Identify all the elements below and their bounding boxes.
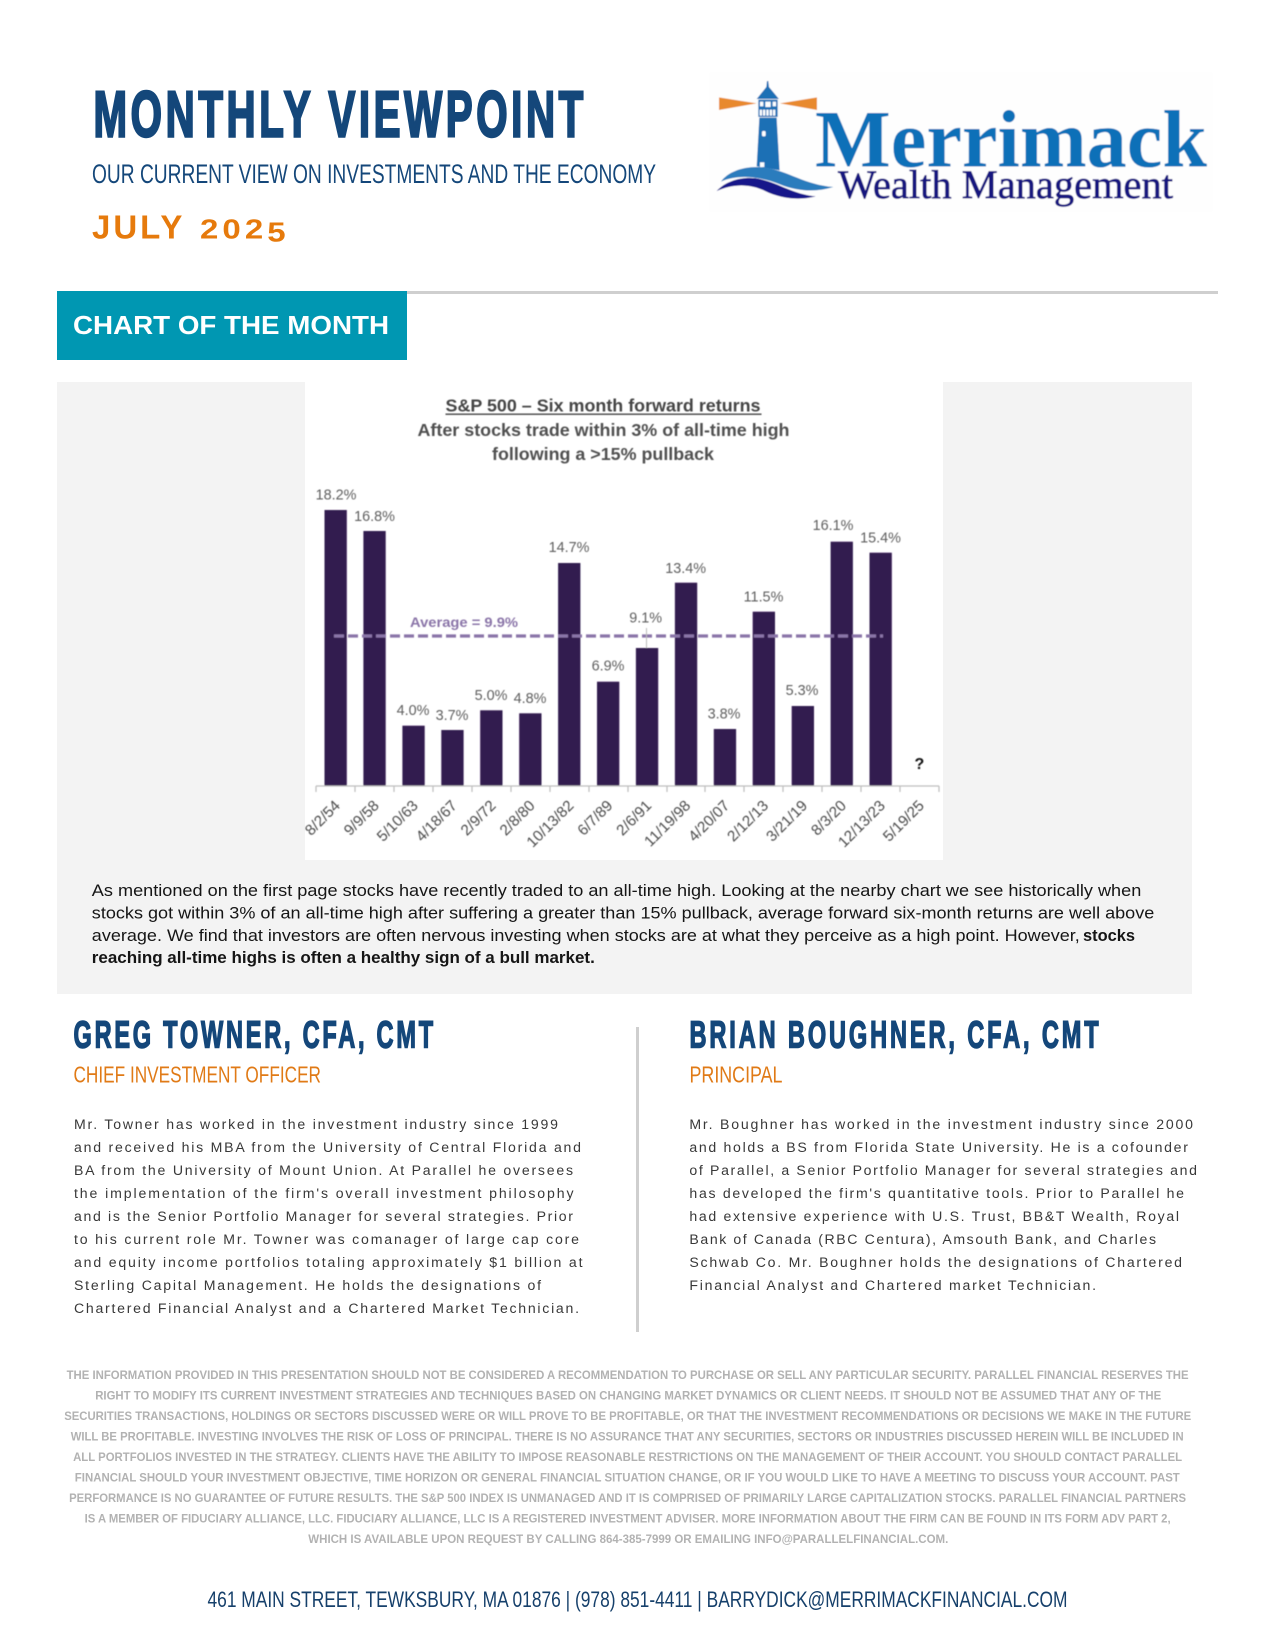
role: CHIEF INVESTMENT OFFICER — [74, 1062, 321, 1088]
date labels: 8/2/54 — [302, 797, 344, 839]
bar value labels: 6.9% — [592, 659, 625, 675]
disclaimer: THE INFORMATION PROVIDED IN THIS PRESENTATION SHOULD NOT BE CONSIDERED A RECOMMENDATION TO PURCHASE OR SELL ANY PARTICULAR SECURITY. PARALLEL FINANCIAL RESERVES THE — [67, 1370, 1189, 1382]
chart title: S&P 500 – Six month forward returns — [446, 396, 761, 416]
disclaimer: SECURITIES TRANSACTIONS, HOLDINGS OR SECTORS DISCUSSED WERE OR WILL PROVE TO BE PROFITABLE, OR THAT THE INVESTMENT RECOMMENDATIONS OR DECISIONS WE MAKE IN THE FUTURE — [64, 1411, 1192, 1423]
date labels: 5/10/63 — [374, 797, 422, 845]
icon: lighthouse — [717, 81, 833, 199]
chart title: following a >15% pullback — [492, 444, 714, 464]
date — [92, 208, 290, 248]
biography — [74, 1116, 583, 1316]
biography: of Parallel, a Senior Portfolio Manager for several strategies and — [689, 1162, 1197, 1178]
disclaimer: WILL BE PROFITABLE. INVESTING INVOLVES THE RISK OF LOSS OF PRINCIPAL. THERE IS NO ASSURANCE THAT ANY SECURITIES, SECTORS OR INDUSTRIES DISCUSSED HEREIN WILL BE INCLUDED IN — [71, 1432, 1184, 1444]
logo: Merrimack Wealth Management — [709, 72, 1213, 212]
logo wordmark: Merrimack — [815, 94, 1207, 184]
commentary text: reaching all-time highs is often a healthy sign of a bull market. — [92, 949, 595, 967]
bar value labels: 14.7% — [549, 540, 590, 556]
date labels — [302, 797, 928, 851]
bar value labels: 18.2% — [316, 487, 357, 503]
commentary text: As mentioned on the first page stocks have recently traded to an all-time high. Looking at the nearby chart we see historically when — [92, 882, 1141, 900]
bar value labels: 9.1% — [629, 611, 662, 627]
axis — [316, 786, 939, 792]
commentary text: stocks — [1083, 927, 1135, 945]
biography: BA from the University of Mount Union. At Parallel he oversees — [74, 1162, 573, 1178]
disclaimer: FINANCIAL SHOULD YOUR INVESTMENT OBJECTIVE, TIME HORIZON OR GENERAL FINANCIAL SITUATION CHANGE, OR IF YOU WOULD LIKE TO HAVE A MEETING TO DISCUSS YOUR ACCOUNT. PAST — [75, 1472, 1180, 1484]
bar value labels: 15.4% — [860, 531, 901, 547]
date: 5 — [267, 218, 290, 248]
biography: the implementation of the firm's overall investment philosophy — [74, 1185, 574, 1201]
chart title: After stocks trade within 3% of all-time high — [418, 420, 790, 440]
disclaimer — [64, 1370, 1192, 1546]
disclaimer: PERFORMANCE IS NO GUARANTEE OF FUTURE RESULTS. THE S&P 500 INDEX IS UNMANAGED AND IT IS COMPRISED OF PRIMARILY LARGE CAPITALIZATION STOCKS. PARALLEL FINANCIAL PARTNERS — [69, 1493, 1186, 1505]
panel: chart and commentary — [57, 382, 1192, 994]
commentary text — [92, 882, 1154, 967]
section header: chart of the month: CHART OF THE MONTH — [73, 310, 389, 340]
biography: Schwab Co. Mr. Boughner holds the designations of Chartered — [689, 1254, 1182, 1270]
bar value labels: 11.5% — [744, 590, 784, 606]
date labels: 8/3/20 — [808, 797, 850, 839]
date labels: 6/7/89 — [574, 797, 616, 839]
date labels: 11/19/98 — [641, 797, 694, 850]
profile: Brian Boughner — [689, 1013, 1197, 1293]
biography: Mr. Towner has worked in the investment industry since 1999 — [74, 1116, 558, 1132]
biography: and is the Senior Portfolio Manager for several strategies. Prior — [74, 1208, 573, 1224]
bars — [324, 510, 892, 786]
biography: Bank of Canada (RBC Centura), Amsouth Bank, and Charles — [689, 1231, 1156, 1247]
date labels: 5/19/25 — [880, 797, 928, 845]
date labels: 3/21/19 — [763, 797, 811, 845]
biography: Sterling Capital Management. He holds the designations of — [74, 1277, 541, 1293]
bar value labels: 16.1% — [813, 518, 854, 534]
biography: Chartered Financial Analyst and a Chartered Market Technician. — [74, 1300, 579, 1316]
name: BRIAN BOUGHNER, CFA, CMT — [690, 1013, 1099, 1056]
bar value labels: 13.4% — [665, 561, 706, 577]
commentary text: stocks got within 3% of an all-time high after suffering a greater than 15% pullback, average forward six-month returns are well above — [92, 904, 1154, 922]
date labels: 2/6/91 — [613, 797, 655, 839]
date: 202 — [200, 215, 267, 245]
biography: to his current role Mr. Towner was comanager of large cap core — [74, 1231, 579, 1247]
biography: and received his MBA from the University of Central Florida and — [74, 1139, 581, 1155]
disclaimer: WHICH IS AVAILABLE UPON REQUEST BY CALLING 864-385-7999 OR EMAILING INFO@PARALLELFINANCIAL.COM. — [308, 1534, 948, 1546]
biography: Mr. Boughner has worked in the investment industry since 2000 — [689, 1116, 1193, 1132]
biography: had extensive experience with U.S. Trust, BB&T Wealth, Royal — [689, 1208, 1179, 1224]
title: MONTHLY VIEWPOINT — [94, 79, 583, 151]
date labels: 4/18/67 — [413, 797, 461, 845]
bar value labels — [316, 487, 924, 773]
date labels: 4/20/07 — [685, 797, 733, 845]
disclaimer: ALL PORTFOLIOS INVESTED IN THE STRATEGY. CLIENTS HAVE THE ABILITY TO IMPOSE REASONABLE RESTRICTIONS ON THE MANAGEMENT OF THEIR ACCOUNT. YOU SHOULD CONTACT PARALLEL — [73, 1452, 1182, 1464]
logo tagline: Wealth Management — [838, 162, 1173, 207]
bar value labels: 4.8% — [514, 691, 547, 707]
average line: Average = 9.9% — [410, 614, 519, 630]
date labels: 2/12/13 — [724, 797, 772, 845]
section header: chart of the month — [57, 291, 1218, 360]
date labels: 12/13/23 — [835, 797, 889, 851]
biography: has developed the firm's quantitative tools. Prior to Parallel he — [689, 1185, 1184, 1201]
biography — [689, 1116, 1197, 1293]
bar value labels: 16.8% — [354, 509, 395, 525]
biography: Financial Analyst and Chartered market Technician. — [689, 1277, 1096, 1293]
bar value labels: 4.0% — [397, 703, 430, 719]
date labels: 2/9/72 — [458, 797, 500, 839]
date: JULY — [92, 208, 185, 245]
commentary text: average. We find that investors are often nervous investing when stocks are at what they perceive as a high point. However, — [92, 927, 1080, 945]
chart title — [418, 396, 790, 464]
disclaimer: IS A MEMBER OF FIDUCIARY ALLIANCE, LLC. FIDUCIARY ALLIANCE, LLC IS A REGISTERED INVESTMENT ADVISER. MORE INFORMATION ABOUT THE FIRM CAN BE FOUND IN ITS FORM ADV PART 2, — [85, 1514, 1171, 1526]
bar value labels: 3.8% — [708, 707, 741, 723]
name: GREG TOWNER, CFA, CMT — [74, 1013, 433, 1056]
date labels: 10/13/82 — [524, 797, 577, 851]
bar value labels: 3.7% — [436, 708, 469, 724]
bar chart: S&P 500 six month forward returns — [302, 382, 943, 860]
disclaimer: RIGHT TO MODIFY ITS CURRENT INVESTMENT STRATEGIES AND TECHNIQUES BASED ON CHANGING MARKET DYNAMICS OR CLIENT NEEDS. IT SHOULD NOT BE ASSUMED THAT ANY OF THE — [95, 1390, 1162, 1402]
biography: and equity income portfolios totaling approximately $1 billion at — [74, 1254, 583, 1270]
bar value labels: ? — [914, 756, 924, 773]
date labels: 2/8/80 — [497, 797, 539, 839]
biography: and holds a BS from Florida State University. He is a cofounder — [689, 1139, 1188, 1155]
bar value labels: 5.3% — [786, 683, 819, 699]
role: PRINCIPAL — [690, 1062, 782, 1088]
date labels: 9/9/58 — [341, 797, 383, 839]
subtitle: OUR CURRENT VIEW ON INVESTMENTS AND THE ECONOMY — [92, 159, 656, 189]
bar value labels: 5.0% — [475, 688, 508, 704]
profile: Greg Towner — [74, 1013, 583, 1316]
